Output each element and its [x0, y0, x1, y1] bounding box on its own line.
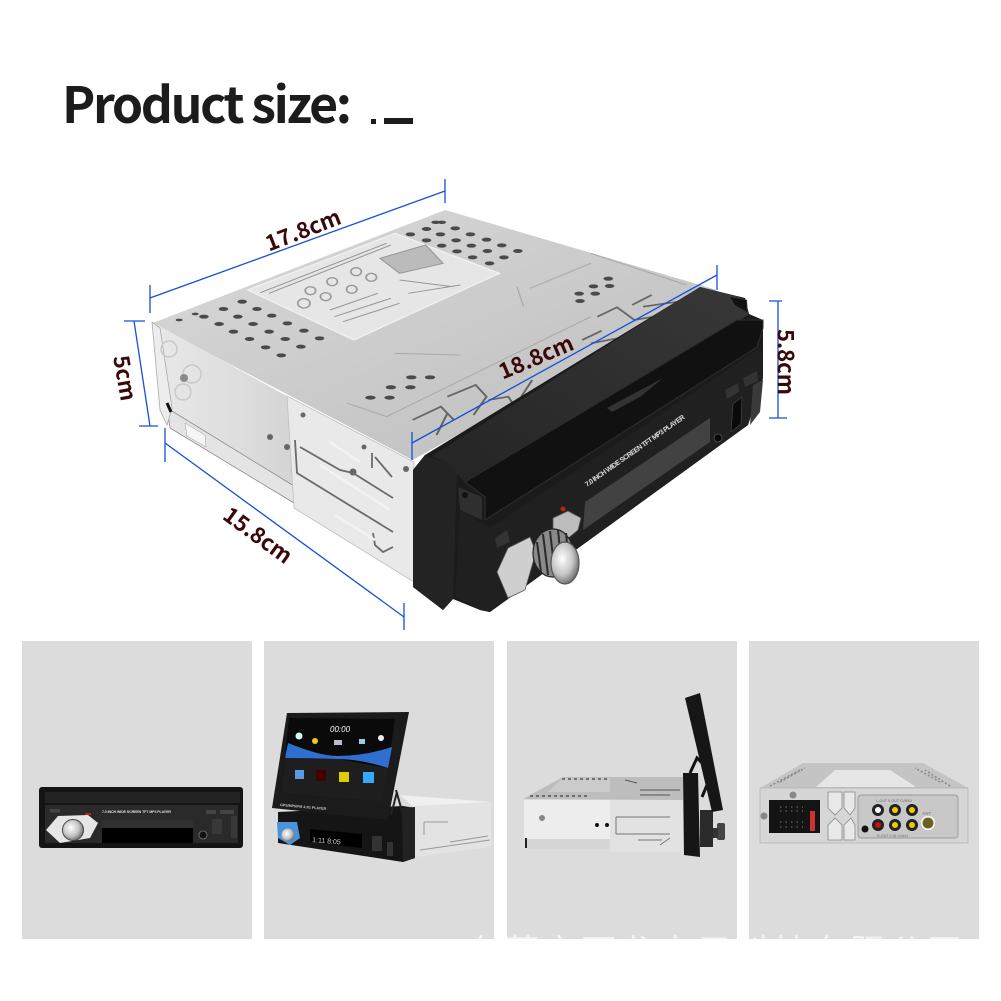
- front bezel and knob: [683, 758, 725, 857]
- main product image: car stereo chassis: [152, 210, 763, 612]
- dimension: 5.8cm: [769, 301, 803, 418]
- flap top surface: [432, 287, 748, 482]
- chassis rear: [760, 763, 968, 843]
- screen support arm: [391, 790, 404, 818]
- flap front: [465, 320, 763, 520]
- screen edge: [685, 693, 723, 812]
- fold-out screen: GPS/MP5/FM 4.3G PLAYER: [280, 803, 327, 811]
- stereo front: [39, 787, 243, 848]
- dimension: 15.8cm: [165, 428, 404, 630]
- volume knob: [533, 529, 579, 584]
- panel: screen open view: [264, 641, 494, 939]
- metal chassis: [152, 210, 717, 582]
- RCA socket plate: L-OUT V-OUT CVBS2: [876, 799, 912, 803]
- black front panel: [413, 287, 763, 612]
- chrome buttons: [497, 537, 536, 598]
- stereo front: 7.0 INCH WIDE SCREEN TFT MP3 PLAYER: [102, 810, 171, 814]
- dimension: 17.8cm: [150, 179, 445, 313]
- dimension: 15.8cm: 15.8cm: [217, 498, 300, 570]
- RCA socket plate: ANT: [922, 811, 931, 816]
- panel: side view: [507, 641, 737, 939]
- flap side piece: [458, 487, 482, 520]
- fold-out screen: 00:00: [330, 725, 351, 734]
- chassis side: [523, 777, 683, 852]
- wiring connector: [760, 792, 820, 833]
- lower control panel: 1:11 8:05: [312, 837, 341, 847]
- RCA socket plate: R-OUT V-IN Cvbs1: [877, 834, 908, 838]
- watermark: 东莞市亚龙电子科技有限公司: [465, 932, 966, 973]
- dimension: 18.8cm: [412, 265, 717, 460]
- title: Product size:: [62, 66, 350, 138]
- lower control panel: [455, 350, 763, 612]
- dimension: 5.8cm: 5.8cm: [771, 329, 803, 395]
- front panel text: 7.0 INCH WIDE SCREEN TFT MP3 PLAYER: [584, 414, 686, 489]
- dimension: 17.8cm: 17.8cm: [260, 200, 345, 258]
- panel: rear view: [749, 641, 979, 939]
- dimension: 5cm: 5cm: [106, 352, 146, 403]
- dimension: 5cm: [106, 321, 158, 426]
- fold-out screen: [272, 712, 409, 820]
- panel: front view: [22, 641, 252, 939]
- RCA socket plate: [858, 795, 958, 838]
- dimension: 18.8cm: 18.8cm: [493, 326, 578, 386]
- silver body: [400, 795, 492, 857]
- side plate: [152, 322, 294, 490]
- left bezel: [413, 455, 457, 610]
- display: [583, 418, 710, 530]
- control buttons: [495, 371, 763, 548]
- lower control panel: [277, 806, 415, 862]
